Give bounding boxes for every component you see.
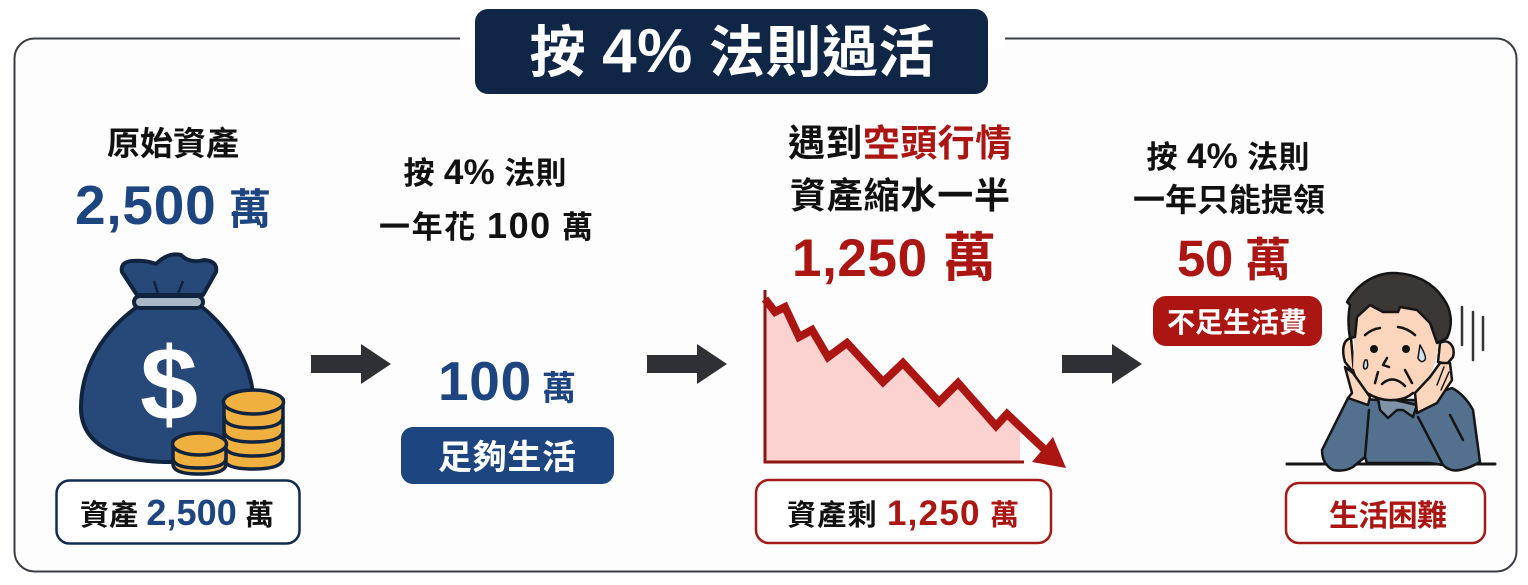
value: 100 wan: 100 萬 <box>438 350 576 412</box>
label box: hard to live <box>1286 483 1485 543</box>
sweat <box>1418 345 1425 362</box>
column 4: withdrawal <box>1133 137 1495 543</box>
icon: money bag with coins <box>81 254 284 474</box>
icon: worried man <box>1287 273 1495 471</box>
badge: enough to live <box>401 427 614 484</box>
value: 2,500 wan: 2,500 萬 <box>75 174 271 236</box>
badge: insufficient: 不足生活費 <box>1167 307 1307 338</box>
motion lines <box>1462 307 1483 360</box>
chart: falling line <box>765 290 1066 468</box>
heading: original assets: 原始資產 <box>107 125 239 162</box>
collar <box>1378 398 1417 418</box>
sweater <box>1322 388 1480 471</box>
badge: insufficient <box>1153 296 1322 346</box>
ears <box>1343 338 1354 373</box>
value: 50 wan: 50 萬 <box>1177 230 1291 287</box>
column 3: bear market <box>756 123 1066 543</box>
arrow 3 <box>1062 344 1142 384</box>
left hand <box>1345 367 1370 405</box>
brows, eyes and mouth <box>1365 327 1415 335</box>
column 3: bear market: 資產縮水一半 <box>790 175 1010 216</box>
label box: assets left 1,250 wan: 資產剩 1,250 萬 <box>787 494 1019 533</box>
hair <box>1347 273 1451 343</box>
heading: withdrawal rule: 按 4% 法則 <box>1146 137 1310 176</box>
face <box>1353 298 1438 400</box>
arrow 2 <box>647 344 727 384</box>
title banner: 按 4% 法則過活 <box>530 17 934 86</box>
right hand <box>1415 363 1452 413</box>
title banner <box>460 9 1005 94</box>
heading: bear market: 遇到空頭行情 <box>788 123 1012 164</box>
value: 1,250 wan: 1,250 萬 <box>792 229 996 288</box>
arrow 1 <box>311 344 391 384</box>
label box: assets left 1,250 wan <box>756 480 1051 543</box>
label box: assets 2,500 wan: 資產 2,500 萬 <box>80 492 274 533</box>
label box: assets 2,500 wan <box>56 480 300 544</box>
icon: money bag with coins: $ <box>140 327 198 443</box>
badge: enough to live: 足夠生活 <box>438 439 576 477</box>
label box: hard to live: 生活困難 <box>1329 500 1447 533</box>
column 2: spending: 一年花 100 萬 <box>379 205 593 246</box>
column 1: original assets <box>56 125 300 544</box>
heading: spending rule: 按 4% 法則 <box>404 153 566 192</box>
column 4: withdrawal: 一年只能提領 <box>1133 182 1325 218</box>
column 2: spending <box>379 153 614 484</box>
